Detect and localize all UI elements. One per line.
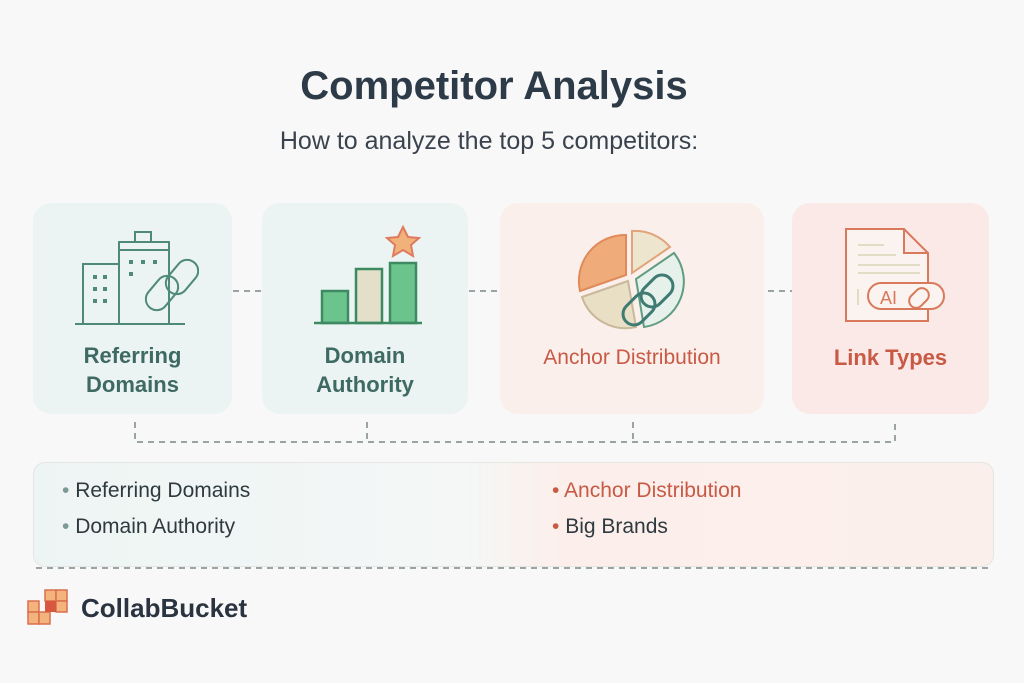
icon: bar chart with star [314,224,422,324]
label [316,343,414,397]
label: Authority [316,372,414,397]
logo [27,589,247,625]
label: Anchor Distribution [543,346,721,369]
label: Domains [86,372,179,397]
label: Domain [325,343,405,368]
subtitle: How to analyze the top 5 competitors: [280,127,698,155]
label: Link Types [834,345,947,370]
icon: document with AI link: AI [880,288,897,308]
label [84,343,181,397]
icon: logo blocks [27,589,68,625]
icon: buildings with link [75,231,199,325]
list item: big brands: • Big Brands [552,515,668,538]
brand name: CollabBucket [81,593,247,623]
list item: domain authority: • Domain Authority [62,515,235,538]
card: referring domains [33,203,232,414]
list item: anchor distribution: • Anchor Distribution [552,479,741,502]
summary panel [33,462,994,567]
icon: pie chart with link [578,230,685,330]
icon: document with AI link [845,228,945,322]
list item: referring domains: • Referring Domains [62,479,250,502]
card: link types [792,203,989,414]
title: Competitor Analysis [300,64,688,108]
card: domain authority [262,203,468,414]
label: Referring [84,343,181,368]
card: anchor distribution [500,203,764,414]
